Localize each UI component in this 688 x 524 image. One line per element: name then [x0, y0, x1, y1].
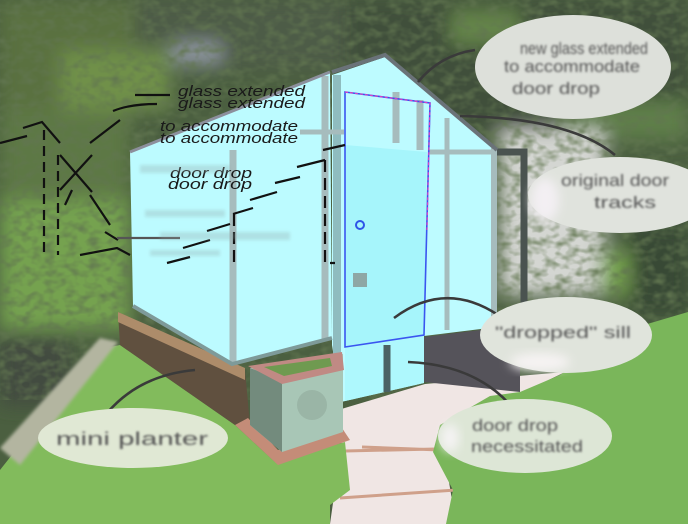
annotation text: glass extended to accommodate door drop: door drop: [168, 176, 252, 193]
door bottom post: [384, 345, 390, 392]
lawn: [0, 312, 688, 524]
annotation text: glass extended to accommodate door drop: [160, 83, 306, 193]
leader: planter: [108, 370, 195, 412]
door glass: [345, 145, 427, 347]
paving stones: [330, 372, 565, 524]
callout: door drop necessitated: necessitated: [471, 437, 583, 456]
callout: dropped sill: "dropped" sill: [495, 323, 631, 342]
callout: original door tracks: original door: [561, 171, 669, 190]
door handle: [356, 221, 364, 229]
lower door panel: [345, 335, 424, 401]
callout: original door tracks: [528, 157, 688, 233]
brick base: [118, 312, 350, 465]
greenhouse frame: [130, 55, 497, 402]
callout: glass extended: door drop: [512, 79, 600, 98]
front wall panel: [332, 57, 497, 402]
callout: dropped sill: [480, 297, 652, 373]
annotation text: glass extended to accommodate door drop: to accommodate: [160, 130, 298, 147]
callout: door drop necessitated: door drop: [472, 416, 558, 435]
callout: glass extended: to accommodate: [504, 57, 640, 76]
callout: door drop necessitated: [438, 399, 612, 473]
annotation text: glass extended to accommodate door drop: glass extended: [178, 83, 306, 100]
annotation text: glass extended to accommodate door drop: glass extended: [178, 95, 306, 112]
planter: [248, 352, 344, 452]
leader: dropped sill: [394, 298, 498, 318]
right trellis post: [497, 152, 524, 305]
glitched annotation strokes: [0, 95, 345, 263]
leader: door drop: [408, 362, 516, 412]
callout: mini planter: [38, 408, 228, 468]
callout: glass extended: [475, 15, 671, 119]
callout: mini planter: mini planter: [56, 429, 208, 449]
door outline: [345, 92, 430, 347]
annotation text: glass extended to accommodate door drop: to accommodate: [160, 118, 298, 135]
greenhouse glass: [130, 57, 497, 402]
door latch: [353, 273, 367, 287]
dark base right of door: [424, 328, 520, 392]
faded glass reflections: [140, 165, 290, 256]
callout: glass extended: new glass extended: [520, 39, 648, 58]
left wall panel: [130, 72, 332, 364]
leader: glass extended: [418, 50, 475, 82]
leader: door tracks: [460, 116, 615, 155]
annotation text: glass extended to accommodate door drop: door drop: [170, 165, 252, 182]
callout: original door tracks: tracks: [594, 193, 656, 212]
